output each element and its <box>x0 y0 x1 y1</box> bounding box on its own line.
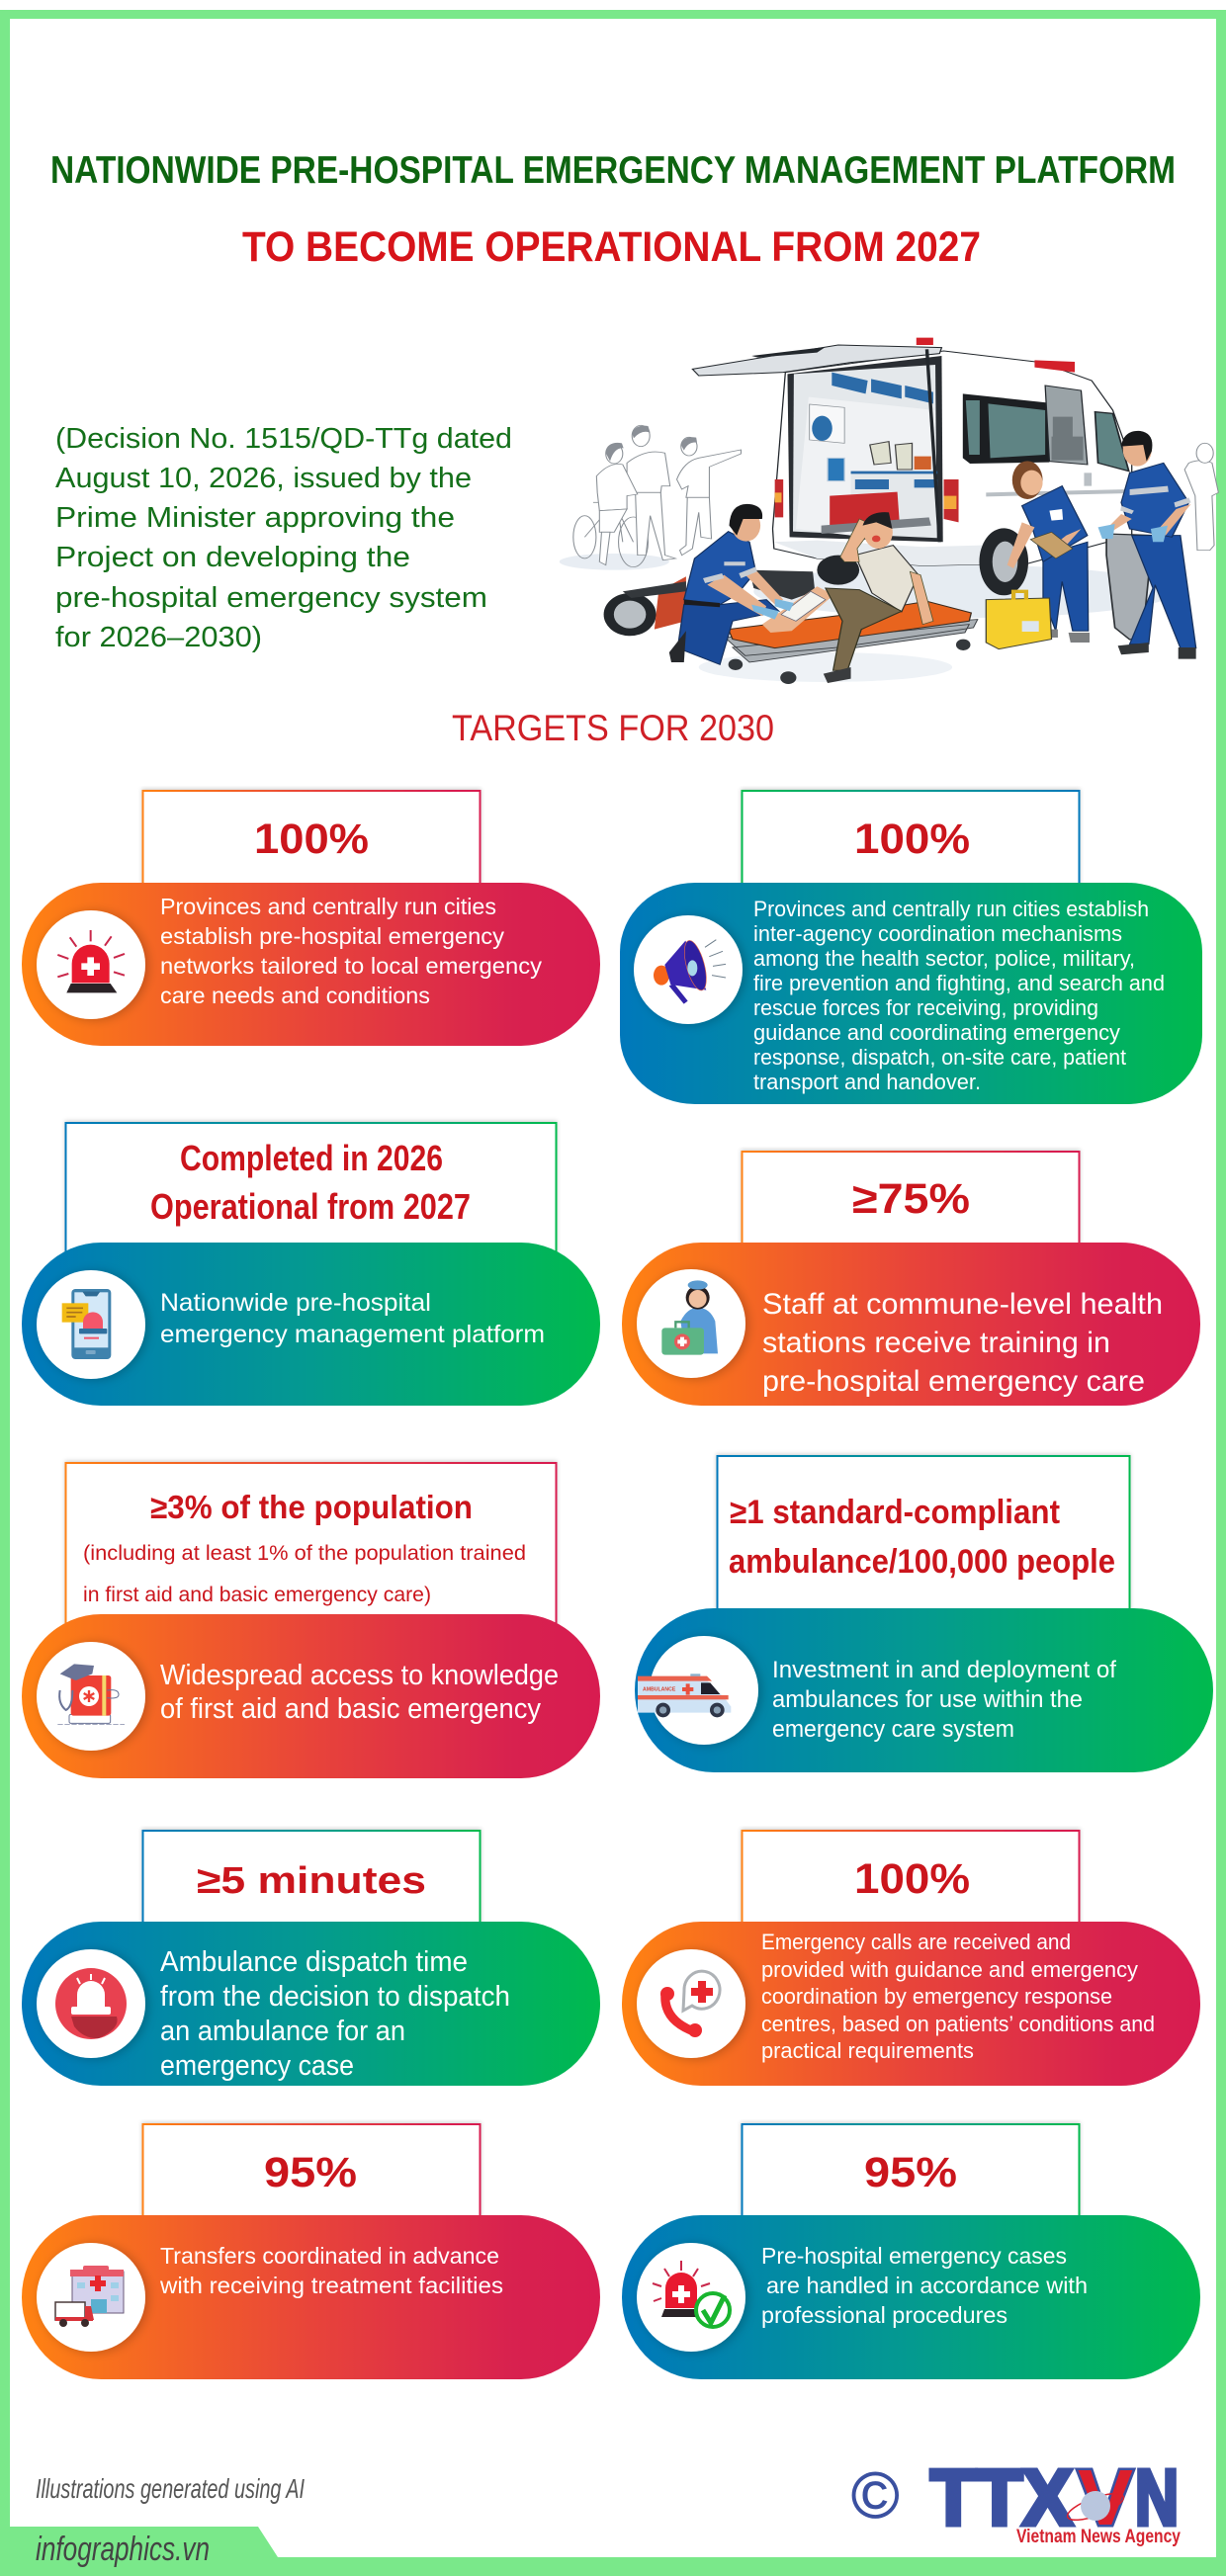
pill <box>622 1243 1200 1406</box>
description <box>160 1289 545 1348</box>
icon: nurse with medical bag <box>637 1269 745 1378</box>
value: 95% <box>264 2149 357 2196</box>
decision reference text: pre-hospital emergency system <box>55 582 487 614</box>
description <box>761 1930 1155 2063</box>
value: ≥75% <box>852 1175 970 1223</box>
roof lights <box>917 338 1075 373</box>
description: ambulances for use within the <box>772 1686 1083 1713</box>
value note: in first aid and basic emergency care) <box>83 1584 431 1606</box>
description <box>772 1657 1116 1743</box>
decision reference text: (Decision No. 1515/QD-TTg dated <box>55 423 512 455</box>
panel: professional procedures <box>622 2124 1200 2379</box>
rear lights <box>775 479 959 522</box>
description: Transfers coordinated in advance <box>160 2243 499 2269</box>
paramedic kneeling <box>677 600 779 664</box>
decision reference text: August 10, 2026, issued by the <box>55 463 472 494</box>
icon: first aid book <box>37 1642 145 1751</box>
panel: inter-agency coordination <box>620 791 1202 1104</box>
copyright symbol: © <box>851 2458 900 2532</box>
description: Widespread access to knowledge <box>160 1660 559 1691</box>
heading: targets: TARGETS FOR 2030 <box>452 708 774 748</box>
logo: TTXVN Vietnam News Agency: N <box>1135 2453 1179 2541</box>
stretcher <box>725 620 978 662</box>
bystander right <box>1184 443 1218 551</box>
description: fire prevention and fighting, and search and <box>753 971 1165 995</box>
title <box>50 149 1176 271</box>
pill <box>22 883 600 1046</box>
description <box>761 2243 1088 2328</box>
value: ≥1 standard-compliant <box>730 1494 1060 1531</box>
side windows <box>963 393 1049 464</box>
description: transport and handover. <box>753 1070 981 1094</box>
icon: hospital and ambulance <box>37 2243 145 2352</box>
description: guidance and coordinating emergency <box>753 1020 1120 1045</box>
folding stretcher board <box>1106 534 1153 640</box>
pill <box>22 2215 600 2379</box>
paramedic standing <box>1130 536 1196 648</box>
value: 95% <box>864 2149 957 2196</box>
value: ≥3% of the population <box>150 1489 473 1525</box>
description: care needs and conditions <box>160 983 430 1008</box>
description: Emergency calls are received and <box>761 1930 1071 1954</box>
icon: megaphone <box>634 915 743 1024</box>
footer tab: infographics.vn: infographics.vn <box>36 2531 210 2568</box>
patient <box>855 546 919 612</box>
description: coordination by emergency response <box>761 1984 1112 2009</box>
pill <box>22 1614 600 1778</box>
value: 100% <box>854 816 970 863</box>
description <box>753 897 1165 1094</box>
description: from the decision to dispatch <box>160 1981 510 2013</box>
description: emergency case <box>160 2050 354 2082</box>
description: stations receive training in <box>762 1327 1110 1359</box>
pill <box>22 1243 600 1406</box>
wheels <box>979 528 1028 595</box>
value: Operational from 2027 <box>150 1186 471 1227</box>
description <box>160 894 543 1008</box>
description: establish pre-hospital emergency <box>160 923 505 949</box>
icon: alarm on red disc <box>37 1949 145 2058</box>
description: Investment in and deployment of <box>772 1657 1116 1683</box>
description: inter-agency coordination mechanisms <box>753 921 1122 946</box>
description: practical requirements <box>761 2038 974 2063</box>
description: networks tailored to local emergency <box>160 953 543 979</box>
panel: transfers coordinated <box>22 2124 600 2379</box>
description: of first aid and basic emergency <box>160 1693 541 1725</box>
description: Provinces and centrally run cities <box>160 894 496 919</box>
icon: phone and medical bubble <box>637 1949 745 2058</box>
value <box>150 1138 471 1227</box>
decision reference text: Prime Minister approving the <box>55 502 455 534</box>
description: Provinces and centrally run cities establish <box>753 897 1149 921</box>
description: professional procedures <box>761 2302 1007 2328</box>
decision reference text: Project on developing the <box>55 542 410 573</box>
description: an ambulance for an <box>160 2016 405 2047</box>
pill <box>622 2215 1200 2379</box>
logo: TTXVN Vietnam News Agency: V <box>1078 2453 1133 2541</box>
yellow medical case <box>986 598 1052 649</box>
logo: TTXVN Vietnam News Agency <box>930 2453 1181 2547</box>
value: ≥5 minutes <box>197 1860 426 1902</box>
icon: ambulance <box>638 1636 758 1745</box>
icon: ambulance: AMBULANCE <box>643 1687 676 1693</box>
value: Completed in 2026 <box>180 1138 443 1178</box>
pill <box>22 1922 600 2086</box>
decision reference text <box>55 423 512 653</box>
description: provided with guidance and emergency <box>761 1957 1138 1982</box>
pill <box>620 883 1202 1104</box>
pill <box>635 1608 1213 1772</box>
description <box>762 1288 1163 1398</box>
description: are handled in accordance with <box>766 2273 1088 2298</box>
description: response, dispatch, on-site care, patient <box>753 1045 1126 1070</box>
description <box>160 1660 559 1725</box>
raised tailgate <box>692 345 941 376</box>
description: emergency management platform <box>160 1321 545 1348</box>
bystanders left <box>573 425 741 567</box>
value: 100% <box>254 816 369 863</box>
logo: TTXVN Vietnam News Agency: Vietnam News Agency <box>1016 2527 1181 2547</box>
value: ambulance/100,000 people <box>729 1543 1115 1581</box>
illustration: ambulance and paramedics at accident scene <box>560 338 1218 684</box>
panel: nationwide platform <box>22 1123 600 1406</box>
icon: phone alert <box>37 1270 145 1379</box>
description <box>159 2243 503 2298</box>
pill <box>622 1922 1200 2086</box>
description: Nationwide pre-hospital <box>160 1289 431 1317</box>
panel: provincial emergency networks <box>22 791 600 1046</box>
nurse paramedic <box>1043 542 1089 631</box>
description: centres, based on patients’ conditions and <box>761 2012 1155 2036</box>
description: Pre-hospital emergency cases <box>761 2243 1067 2269</box>
decision reference text: for 2026–2030) <box>55 622 262 653</box>
title line 2: TO BECOME OPERATIONAL FROM 2027 <box>242 223 981 271</box>
panel: ambulance ratio <box>635 1456 1213 1772</box>
value note: (including at least 1% of the population trained <box>83 1542 526 1565</box>
description: with receiving treatment facilities <box>159 2273 503 2298</box>
value: 100% <box>854 1855 970 1903</box>
motorbike <box>604 593 657 636</box>
ambulance van <box>773 351 1132 565</box>
rear compartment <box>787 356 943 542</box>
description: emergency care system <box>772 1716 1014 1743</box>
description: Staff at commune-level health <box>762 1288 1163 1321</box>
value <box>729 1494 1115 1581</box>
value note <box>83 1542 526 1606</box>
description: pre-hospital emergency care <box>762 1365 1145 1398</box>
description: rescue forces for receiving, providing <box>753 995 1098 1020</box>
panel: emergency calls <box>622 1831 1200 2086</box>
icon: siren <box>37 910 145 1019</box>
footer note: AI illustrations: Illustrations generated using AI <box>36 2473 305 2504</box>
description: among the health sector, police, military, <box>753 946 1135 971</box>
icon: siren with check mark <box>637 2243 745 2352</box>
description: Ambulance dispatch time <box>160 1946 468 1978</box>
panel: commune-level staff training <box>622 1152 1200 1406</box>
description <box>160 1946 510 2082</box>
logo: TTXVN Vietnam News Agency: TTX <box>930 2453 1073 2541</box>
panel: ambulance dispatch time <box>22 1831 600 2086</box>
panel: first aid knowledge <box>22 1463 600 1778</box>
